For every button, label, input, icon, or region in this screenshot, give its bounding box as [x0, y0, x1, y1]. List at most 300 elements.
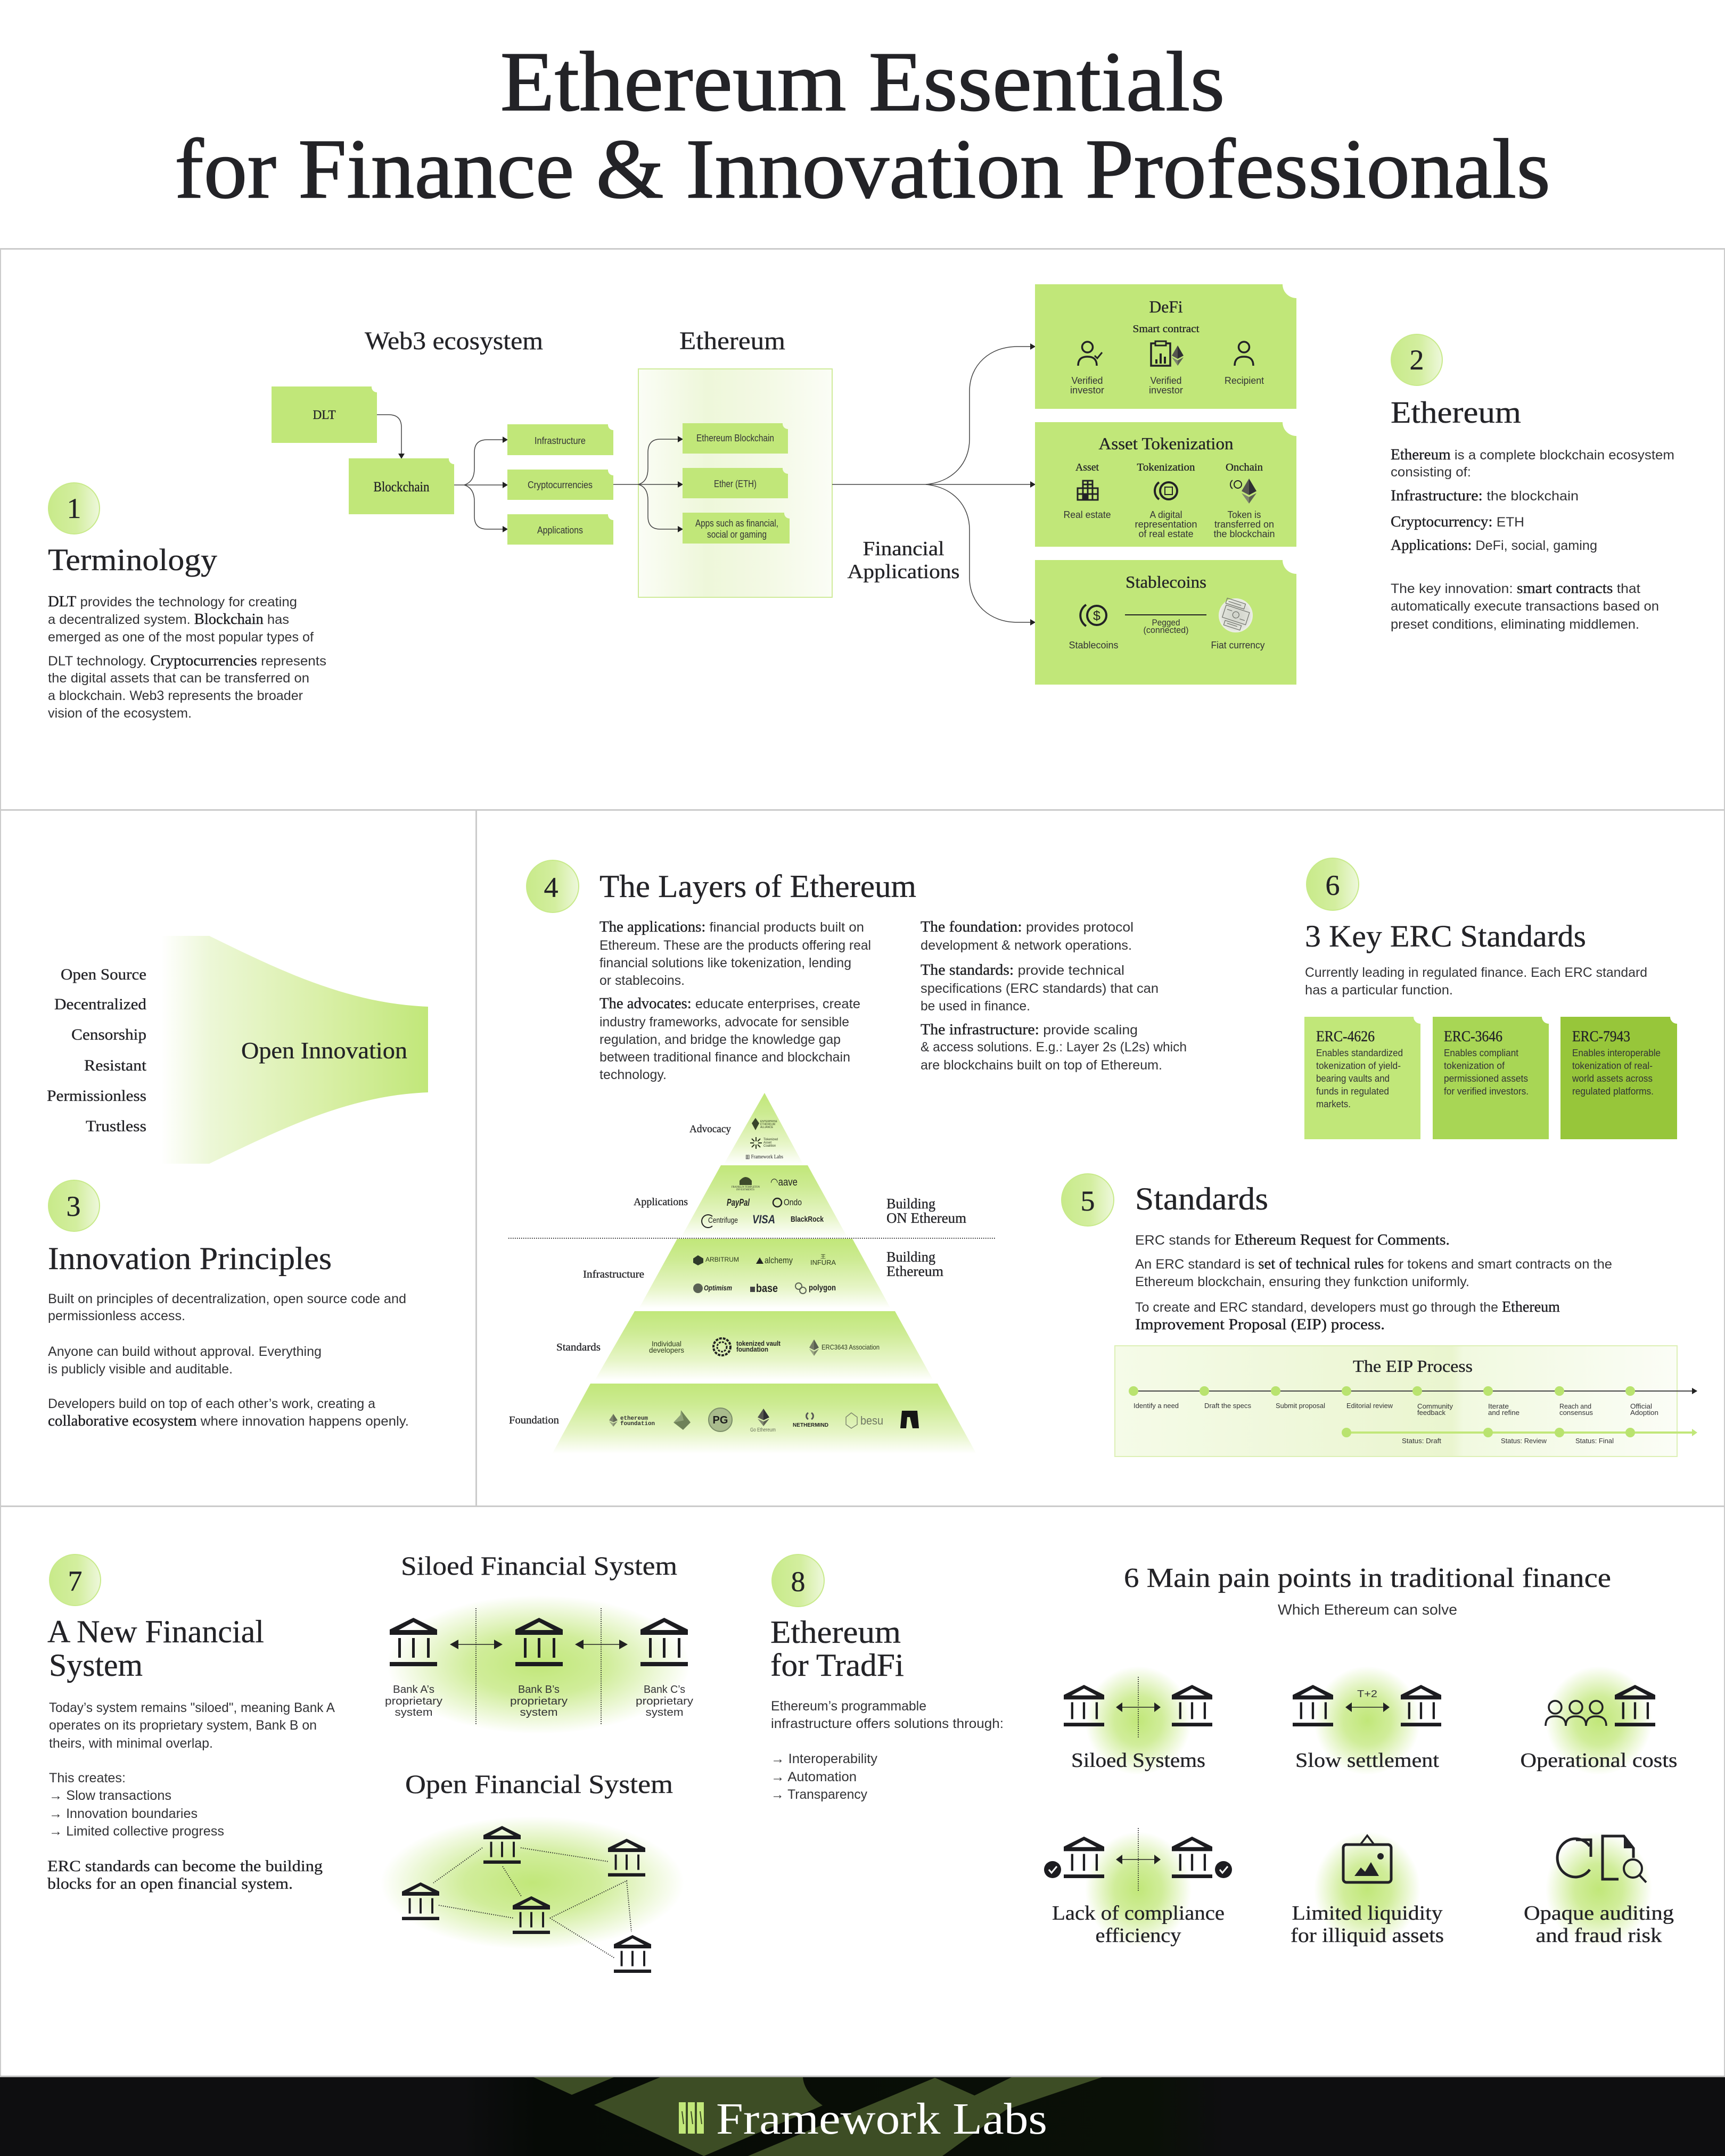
icon: token [1155, 482, 1177, 499]
tier: Infrastructure: INFURA [810, 1258, 836, 1266]
card: Stablecoins: Fiat currency [1211, 640, 1265, 651]
body text: Cryptocurrency: ETH [1391, 514, 1524, 530]
box: DLT [272, 386, 377, 443]
labels: banks: Bank C’s [644, 1684, 685, 1696]
panel: 6 main pain points [1044, 1563, 1677, 1947]
body text: permissionless access. [48, 1309, 185, 1323]
box: Blockchain: Blockchain [374, 479, 429, 495]
body column 2: be used in finance. [921, 999, 1030, 1014]
body text: vision of the ecosystem. [48, 706, 192, 721]
tier: Foundation: Go Ethereum [750, 1427, 776, 1433]
body text: Developers build on top of each other’s work, creating a [48, 1396, 375, 1411]
box: Ethereum Blockchain [683, 423, 788, 454]
body column 1: Ethereum. These are the products offering real [599, 938, 871, 953]
tier: Applications: ◠aave [770, 1176, 798, 1188]
timeline: steps: Official [1630, 1402, 1652, 1410]
number badge 7 [50, 1554, 101, 1606]
tier: Advocacy: ETHEREUM [760, 1123, 775, 1126]
body column 1: technology. [599, 1067, 667, 1082]
intro text: has a particular function. [1305, 983, 1453, 998]
body text: To create and ERC standard, developers must go through the Ethereum [1135, 1299, 1560, 1315]
card: DeFi: investor [1070, 385, 1104, 396]
panel: 3 Key ERC Standards [1304, 858, 1677, 1139]
card: Asset Tokenization: representation [1135, 519, 1197, 530]
panel: Innovation Principles text [48, 1180, 409, 1429]
body text: blocks for an open financial system. [47, 1875, 293, 1892]
timeline: status: Status: Final [1575, 1437, 1614, 1445]
chart: open innovation funnel: Open Source [61, 966, 146, 983]
tier: Infrastructure: ARBITRUM [705, 1256, 739, 1263]
arrow: DLT to Blockchain [377, 415, 401, 458]
heading: Innovation Principles: Innovation Principles [48, 1241, 332, 1276]
timeline: steps: Reach and [1559, 1402, 1591, 1410]
heading: Ethereum: Ethereum [1391, 395, 1521, 430]
body text [771, 1699, 1004, 1802]
card: Stablecoins: Stablecoins [1069, 640, 1118, 651]
chart: web3 ecosystem flow [272, 327, 1035, 622]
connector: pegged: Pegged [1152, 618, 1180, 628]
card: ERC-3646: Enables compliant [1444, 1048, 1518, 1058]
tier: Applications: BlackRock [791, 1215, 824, 1224]
body column 1: The applications: financial products built on [599, 919, 864, 935]
number badge 1: 1 [67, 492, 81, 524]
tier: Foundation: Foundation [509, 1414, 559, 1426]
timeline: steps: Submit proposal [1276, 1402, 1325, 1410]
label: Financial Applications: Financial [862, 538, 944, 560]
labels: banks: system [395, 1707, 432, 1718]
timeline: steps: and refine [1488, 1409, 1519, 1417]
box: Infrastructure [507, 424, 613, 455]
diagram: Siloed Financial System: Siloed Financial System [401, 1551, 677, 1581]
icon: Bank B [515, 1618, 563, 1666]
tier: Advocacy: Advocacy [689, 1123, 731, 1135]
icons: connected banks [402, 1826, 651, 1973]
heading: Ethereum [770, 1615, 901, 1650]
tier: Applications: Centrifuge [708, 1216, 738, 1225]
icon: onchain token and ether [1230, 479, 1256, 504]
panel: Ethereum container [638, 369, 832, 597]
body text: Anyone can build without approval. Everything [48, 1344, 322, 1359]
arrows: Blockchain fork [454, 440, 507, 529]
tier: Standards: Individual [652, 1339, 681, 1348]
heading: The Layers of Ethereum [599, 869, 916, 904]
card: Asset Tokenization: A digital [1150, 509, 1182, 520]
card: DeFi [1035, 284, 1296, 409]
card: ERC-4626: bearing vaults and [1316, 1073, 1390, 1084]
body column 2: & access solutions. E.g.: Layer 2s (L2s) which [921, 1040, 1187, 1055]
labels: Building Ethereum: Ethereum [886, 1263, 943, 1279]
pain point: Siloed Systems [1064, 1666, 1212, 1775]
body text: The key innovation: smart contracts that [1391, 580, 1640, 597]
timeline: status: Status: Draft [1402, 1437, 1441, 1445]
number badge 2 [1391, 334, 1442, 385]
card: DeFi: investor [1149, 385, 1183, 396]
pain point: Operational costs [1521, 1666, 1677, 1775]
heading [770, 1615, 904, 1683]
body text [1135, 1232, 1612, 1333]
heading: 6 Main pain points in traditional finance [1124, 1563, 1611, 1593]
pain point: Limited liquidity: Limited liquidity [1292, 1902, 1443, 1924]
tier: Infrastructure: Infrastructure [583, 1269, 644, 1280]
body text [47, 1700, 335, 1892]
labels: banks: proprietary [385, 1696, 442, 1707]
body text: is publicly visible and auditable. [48, 1362, 233, 1377]
number badge 8: 8 [791, 1566, 805, 1598]
tier: Standards: tokenized vault [736, 1339, 781, 1347]
tier: Advocacy [689, 1093, 803, 1165]
label: Financial Applications: Applications [848, 561, 959, 583]
body text: a blockchain. Web3 represents the broader [48, 688, 303, 703]
number badge 5 [1062, 1174, 1114, 1226]
body text [1391, 447, 1674, 632]
tier: Advocacy: Tokenized [763, 1138, 778, 1141]
pain point: Lack of compliance efficiency [1044, 1828, 1232, 1947]
title: for Finance & Innovation Professionals [175, 121, 1550, 216]
tier: Foundation: besu [860, 1414, 883, 1427]
body column 1: between traditional finance and blockchain [599, 1050, 850, 1065]
icon: stablecoin [1080, 605, 1106, 626]
tier: Infrastructure: Optimism [704, 1283, 732, 1292]
card: ERC-3646: ERC-3646 [1444, 1028, 1502, 1045]
pain point: Operational costs: Operational costs [1521, 1749, 1677, 1772]
tier: Advocacy: Coalition [763, 1145, 776, 1148]
body text: Ethereum’s programmable [771, 1699, 926, 1714]
panel: terminology text [48, 483, 326, 721]
timeline: steps: Editorial review [1346, 1402, 1393, 1410]
body column 2: development & network operations. [921, 938, 1132, 953]
timeline: steps: Adoption [1630, 1409, 1658, 1417]
pain point: Slow settlement [1293, 1666, 1441, 1775]
body text: Today’s system remains "siloed", meaning Bank A [49, 1700, 335, 1715]
tier: Applications [634, 1165, 848, 1238]
timeline: steps: Community [1417, 1402, 1453, 1410]
tier: Foundation: ethereum [620, 1416, 648, 1422]
icon: Bank A [390, 1618, 437, 1666]
body text: Ethereum blockchain, ensuring they funkction uniformly. [1135, 1274, 1469, 1289]
card: Stablecoins [1035, 560, 1296, 685]
labels: banks [385, 1684, 693, 1718]
heading: Standards [1135, 1181, 1268, 1216]
timeline: status [1342, 1428, 1697, 1445]
chart: EIP process timeline [1115, 1346, 1697, 1456]
heading: Terminology: Terminology [48, 542, 217, 577]
heading: Ethereum column: Ethereum [679, 327, 785, 355]
body text: Infrastructure: the blockchain [1391, 488, 1579, 504]
number badge 4: 4 [544, 871, 558, 903]
tier: Applications: VISA [752, 1213, 775, 1226]
tier: Infrastructure [583, 1239, 891, 1309]
box: Infrastructure: Infrastructure [535, 435, 586, 446]
body text: ERC standards can become the building [47, 1857, 323, 1875]
box: Apps: Apps such as financial, [695, 518, 778, 529]
number badge 4 [527, 860, 579, 912]
labels: Building ON Ethereum: Building [886, 1196, 935, 1212]
tier: Advocacy: ALLIANCE [760, 1126, 774, 1129]
pain point: Opaque auditing: Opaque auditing [1524, 1902, 1674, 1924]
arrow: A to B [450, 1640, 503, 1649]
tier: Foundation [509, 1384, 976, 1454]
body column 1: financial solutions like tokenization, lending [599, 956, 851, 970]
chart: open innovation funnel: Censorship [71, 1026, 146, 1043]
body column 2: The standards: provide technical [921, 962, 1124, 978]
pain point: Limited liquidity [1291, 1832, 1444, 1947]
body text: Improvement Proposal (EIP) process. [1135, 1316, 1385, 1333]
chart: open innovation funnel: Permissionless [47, 1087, 146, 1105]
number badge 6 [1307, 858, 1359, 910]
subheading: Which Ethereum can solve [1278, 1601, 1457, 1618]
tier: Standards: foundation [736, 1345, 768, 1353]
card: DeFi: Recipient [1225, 375, 1264, 386]
body text: ERC stands for Ethereum Request for Comments. [1135, 1232, 1450, 1248]
tier: Infrastructure: polygon [809, 1283, 836, 1293]
card: ERC-3646: for verified investors. [1444, 1086, 1529, 1097]
labels: banks: system [645, 1707, 684, 1718]
body text: infrastructure offers solutions through: [771, 1716, 1004, 1731]
timeline: steps: Iterate [1488, 1402, 1509, 1410]
tier: Standards: developers [649, 1346, 684, 1354]
heading: System [49, 1648, 143, 1683]
card: ERC-3646: tokenization of [1444, 1060, 1505, 1071]
arrows: Ethereum to financial applications [832, 347, 1035, 622]
card: ERC-4626 [1304, 1017, 1420, 1139]
labels: banks: proprietary [510, 1696, 568, 1707]
body column 1 [599, 919, 871, 1082]
tier: Infrastructure: alchemy [765, 1255, 793, 1265]
heading: Web3 ecosystem: Web3 ecosystem [365, 327, 543, 355]
pain point: Opaque auditing: and fraud risk [1535, 1924, 1662, 1947]
box: Applications [507, 514, 613, 545]
card: ERC-4626: tokenization of yield- [1316, 1060, 1401, 1071]
label: Financial Applications [848, 538, 959, 583]
tier: Foundation: foundation [620, 1421, 655, 1427]
diagram: Siloed Financial System [385, 1551, 693, 1734]
panel: The Layers of Ethereum text [527, 860, 1187, 1082]
body text: consisting of: [1391, 465, 1471, 480]
footer [0, 2076, 1725, 2156]
box: Apps [683, 513, 790, 544]
title: Ethereum Essentials [500, 34, 1225, 129]
card: ERC-7943: world assets across [1572, 1073, 1653, 1084]
tier: Applications: FRANKLIN TEMPLETON [732, 1186, 760, 1189]
panel: Ethereum for TradFi text [770, 1554, 1004, 1802]
number badge 6: 6 [1326, 869, 1340, 901]
footer pattern [533, 2077, 1102, 2156]
chart: open innovation funnel: Resistant [84, 1057, 147, 1074]
body column 2: specifications (ERC standards) that can [921, 981, 1159, 996]
timeline: steps [1129, 1386, 1697, 1417]
card: ERC-4626: Enables standardized [1316, 1048, 1403, 1058]
tier: Infrastructure: base [756, 1282, 778, 1295]
icon: fiat money [1219, 598, 1253, 632]
intro text: Currently leading in regulated finance. Each ERC standard [1305, 965, 1647, 980]
card: Asset Tokenization: of real estate [1138, 529, 1194, 539]
tier: Advocacy: ▥ Framework Labs [745, 1154, 783, 1160]
timeline: steps: consensus [1559, 1409, 1593, 1417]
panel: A New Financial System text [47, 1554, 335, 1892]
card: DeFi: Smart contract [1133, 323, 1200, 335]
labels: Building Ethereum: Building [886, 1249, 935, 1265]
number badge 5: 5 [1081, 1185, 1095, 1217]
arrow: B to C [575, 1640, 628, 1649]
labels: banks: system [520, 1707, 558, 1718]
body text: → Transparency [771, 1787, 867, 1802]
chart: open innovation funnel: Open Innovation [241, 1038, 407, 1064]
body text: Ethereum is a complete blockchain ecosystem [1391, 447, 1674, 463]
tier: Applications: Applications [634, 1196, 688, 1208]
card: Asset Tokenization [1035, 422, 1296, 547]
labels: Building ON Ethereum [886, 1196, 966, 1226]
card: Asset Tokenization: Onchain [1226, 462, 1263, 473]
connector: pegged: (connected) [1144, 625, 1188, 635]
body text: → Interoperability [771, 1751, 877, 1766]
card: ERC-7943: regulated platforms. [1572, 1086, 1654, 1097]
pain point: Limited liquidity: for illiquid assets [1291, 1924, 1444, 1947]
timeline: steps: Draft the specs [1204, 1402, 1251, 1410]
card: DeFi: Verified [1150, 375, 1182, 386]
body text: An ERC standard is set of technical rules for tokens and smart contracts on the [1135, 1256, 1612, 1272]
body text: → Limited collective progress [49, 1824, 224, 1839]
body text: → Innovation boundaries [49, 1806, 198, 1821]
box: DLT: DLT [313, 408, 336, 422]
body text: the digital assets that can be transferred on [48, 671, 309, 686]
box: Ether: Ether (ETH) [714, 479, 757, 489]
card: Asset Tokenization: the blockchain [1214, 529, 1275, 539]
body text [48, 594, 326, 721]
pain point: Slow settlement: Slow settlement [1295, 1749, 1439, 1772]
icon: stablecoin: $ [1093, 608, 1100, 623]
labels: banks: proprietary [636, 1696, 693, 1707]
card: Asset Tokenization: Token is [1228, 509, 1261, 520]
tier: Applications: PayPal [727, 1197, 750, 1208]
number badge 7: 7 [68, 1565, 82, 1597]
card: ERC-3646: permissioned assets [1444, 1073, 1528, 1084]
tier: Standards [556, 1311, 933, 1380]
pain point: Siloed Systems: Siloed Systems [1071, 1749, 1205, 1772]
card: ERC-4626: markets. [1316, 1099, 1351, 1109]
heading [47, 1614, 264, 1683]
box: Apps: social or gaming [707, 529, 767, 540]
number badge 1 [48, 483, 100, 534]
card: ERC-3646 [1433, 1017, 1549, 1139]
card: Asset Tokenization: Asset [1075, 462, 1099, 473]
tier: Standards: Standards [556, 1342, 601, 1353]
card: Asset Tokenization: Tokenization [1137, 462, 1195, 473]
tier: Infrastructure: 王 [820, 1254, 826, 1260]
diagram: Open Financial System: Open Financial System [405, 1769, 673, 1799]
tier: Applications: INVESTMENTS [736, 1189, 754, 1191]
chart: EIP process timeline: The EIP Process [1353, 1356, 1473, 1376]
card: Asset Tokenization: transferred on [1214, 519, 1274, 530]
icon: clipboard and ether [1151, 341, 1184, 366]
tier: Applications: Ondo [784, 1197, 802, 1207]
body column 1: industry frameworks, advocate for sensible [599, 1015, 849, 1030]
body column 1: or stablecoins. [599, 973, 685, 988]
arrows: Cryptocurrencies to Ethereum [613, 439, 683, 529]
body text: automatically execute transactions based on [1391, 599, 1659, 614]
tier: Standards: ERC3643 Association [822, 1343, 880, 1351]
labels: banks: Bank B’s [518, 1684, 560, 1696]
title [175, 34, 1550, 216]
icon: Bank C [640, 1618, 688, 1666]
card: ERC-7943 [1560, 1017, 1677, 1139]
number badge 2: 2 [1410, 344, 1424, 376]
card: ERC-7943: ERC-7943 [1572, 1028, 1630, 1045]
body text: a decentralized system. Blockchain has [48, 611, 289, 628]
box: Ether [683, 468, 788, 498]
card: DeFi: DeFi [1149, 297, 1183, 316]
icon: recipient [1235, 342, 1253, 366]
body text: Built on principles of decentralization, open source code and [48, 1291, 406, 1306]
body text: DLT provides the technology for creating [48, 594, 297, 610]
timeline: steps: feedback [1417, 1409, 1445, 1417]
card: ERC-4626: ERC-4626 [1316, 1028, 1375, 1045]
body column 1: regulation, and bridge the knowledge gap [599, 1032, 841, 1047]
number badge 3 [48, 1180, 100, 1231]
tier: Foundation: PG [713, 1414, 728, 1426]
pain point: Lack of compliance efficiency: Lack of compliance [1052, 1902, 1225, 1924]
chart: Ethereum layers pyramid [508, 1093, 995, 1454]
labels: Building ON Ethereum: ON Ethereum [886, 1210, 966, 1226]
body text: theirs, with minimal overlap. [49, 1736, 213, 1751]
intro text [1305, 965, 1647, 998]
body text: This creates: [49, 1771, 126, 1785]
pain point: Slow settlement: T+2 [1357, 1689, 1377, 1699]
card: Stablecoins: Stablecoins [1126, 572, 1206, 591]
heading: A New Financial [47, 1614, 264, 1649]
number badge 3: 3 [66, 1190, 81, 1222]
body column 2: The foundation: provides protocol [921, 919, 1133, 935]
box: Cryptocurrencies: Cryptocurrencies [528, 480, 593, 490]
body text: collaborative ecosystem where innovation happens openly. [48, 1413, 409, 1429]
labels: banks: Bank A’s [393, 1684, 434, 1696]
timeline: steps: Identify a need [1133, 1402, 1179, 1410]
pain point: Opaque auditing [1524, 1832, 1674, 1947]
logo: Framework Labs: Framework Labs [716, 2094, 1047, 2144]
panel: Ethereum text [1391, 334, 1674, 632]
body text: emerged as one of the most popular types of [48, 630, 314, 645]
card: ERC-7943: tokenization of real- [1572, 1060, 1653, 1071]
divider: building on or building Ethereum [508, 1238, 995, 1239]
box: Blockchain [349, 458, 454, 514]
tier: Foundation: NETHERMIND [793, 1422, 828, 1428]
icons: check badges [1044, 1861, 1232, 1878]
body text: DLT technology. Cryptocurrencies represents [48, 653, 326, 669]
labels: Building Ethereum [886, 1249, 943, 1279]
body text: preset conditions, eliminating middlemen. [1391, 617, 1639, 632]
body column 2: are blockchains built on top of Ethereum. [921, 1058, 1162, 1073]
number badge 8 [772, 1554, 824, 1607]
body column 1: The advocates: educate enterprises, create [599, 995, 860, 1012]
card: ERC-4626: funds in regulated [1316, 1086, 1389, 1097]
card: Asset Tokenization: Asset Tokenization [1099, 434, 1233, 453]
body text: Applications: DeFi, social, gaming [1391, 537, 1597, 554]
tier: Advocacy: ENTERPRISE [760, 1120, 778, 1123]
card: DeFi: Verified [1071, 375, 1103, 386]
body text: operates on its proprietary system, Bank B on [49, 1718, 317, 1733]
heading: for TradFi [770, 1648, 904, 1683]
card: ERC-7943: Enables interoperable [1572, 1048, 1661, 1058]
icon: verified investor [1078, 342, 1102, 366]
timeline: status: Status: Review [1501, 1437, 1547, 1445]
chart: open innovation funnel [47, 936, 428, 1164]
body column 2 [921, 919, 1187, 1073]
body text: → Slow transactions [49, 1788, 171, 1803]
body text [48, 1291, 409, 1429]
heading: 3 Key ERC Standards [1305, 919, 1586, 953]
chart: open innovation funnel: Trustless [86, 1117, 146, 1135]
pain point: Lack of compliance efficiency: efficiency [1096, 1924, 1181, 1947]
card: Asset Tokenization: Real estate [1064, 509, 1111, 520]
